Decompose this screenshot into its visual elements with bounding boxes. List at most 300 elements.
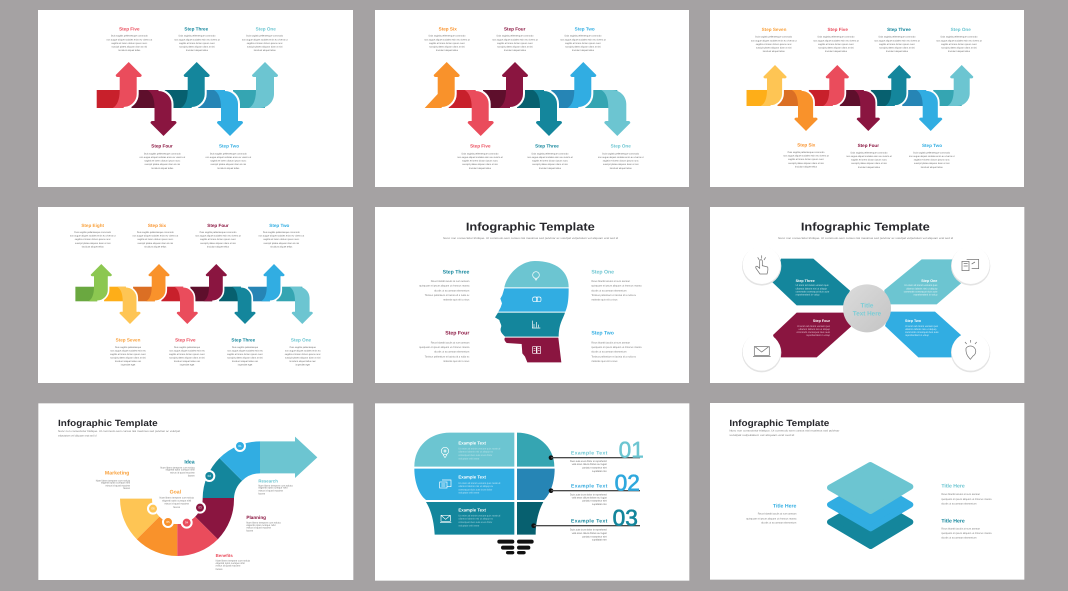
label: step four (846, 143, 892, 169)
label: step three: non augue aliquet sodales enim eu (227, 349, 264, 352)
label: step two: sagittis et lorem dictum ipsum nunc (210, 160, 247, 163)
label: step four: Step Four (504, 27, 526, 32)
label: step seven: suscipit platea aliquam diam at nisi (110, 356, 146, 359)
arrow: step four (840, 90, 880, 131)
label: idea: Nam libero tempore cum soluta (160, 466, 195, 469)
label: left: quisquam et ipsum aliquam ut rhoncus massa (746, 517, 797, 520)
arrow: step one (933, 65, 973, 106)
segment: orange (137, 517, 177, 556)
label: step one: Step One (611, 144, 631, 149)
title: Infographic Template (58, 418, 158, 428)
label: step one: suscipit platea aliquam diam at nisi (285, 356, 321, 359)
label: step six: tincidunt aliquet tellus (144, 245, 167, 248)
label: step three: non augue aliquet sodales enim eu viverra ut (174, 38, 220, 41)
label: step eight: Step Eight (81, 223, 105, 228)
label: step four: Duis sagittis pellentesque commodo (497, 35, 534, 38)
label: step six: Step Six (439, 27, 457, 32)
label: step one: sagittis et lorem dictum ipsum nunc (247, 42, 283, 45)
label: step four (195, 223, 241, 248)
label: step two: Duis sagittis pellentesque commodo (210, 152, 247, 155)
label: step seven: Step Seven (762, 27, 787, 32)
label: step three: quisquam et ipsum aliquam ut rhoncus massa (419, 284, 470, 287)
label: step four: non augue aliquet sodales enim eu viverra ut (139, 156, 186, 159)
bulb: lower right (517, 502, 543, 535)
panel: head infographic (375, 207, 689, 383)
bulb: top left (414, 433, 514, 467)
label: step five: Step Five (175, 338, 196, 343)
panel: five step arrows (38, 10, 353, 187)
segment: red (177, 517, 218, 556)
label: step two: Step Two (575, 27, 595, 32)
label: step four: ullamco laboris nisi ut aliquip (799, 328, 830, 331)
marker 06: 06 (151, 507, 155, 510)
label: step four: sagittis et lorem dictum ipsum nunc (851, 159, 888, 162)
label: step one: tincidunt aliquet tellus (254, 49, 277, 52)
label: step four: Duis sagittis pellentesque commodo (144, 152, 181, 155)
label: step two: Step Two (922, 143, 942, 148)
label: step two: tincidunt aliquet tellus (270, 245, 293, 248)
label: bottom right: Risus blandit iaculis at sum aenean (941, 527, 980, 530)
label: step five: Duis sagittis pellentesque commodo (818, 36, 855, 39)
label: step six: suscipit platea aliquam diam at nisi (788, 162, 824, 165)
label: step five: suscipit platea aliquam diam at nisi (169, 356, 205, 359)
label: step three: Step Three (887, 27, 911, 32)
label: step four: non augue aliquet sodales enim eu viverra ut (846, 155, 892, 158)
subtitle: Nunc non consectetur tristique. Ut commodo sem cursus nisi maximus sed pulvinar (729, 429, 840, 432)
label: step two (560, 27, 606, 52)
label: step four: suscipit platea aliquam diam at nisi (497, 46, 533, 48)
text: example one: ullamco laboris nisi ut aliquip ex (458, 450, 493, 453)
label: step three: Step Three (184, 27, 209, 32)
label: step one: Tortisus pellentium et lacinia id a nulla ex (591, 294, 636, 297)
label: step two: tincidunt aliquet tellus (921, 166, 944, 169)
label: benefits: Nam libero tempore cum soluta (216, 559, 250, 562)
label: step five: tincidunt aliquet tellus (469, 167, 492, 170)
label: step seven (751, 27, 797, 53)
label: step five (106, 27, 153, 52)
panel: stacked layers (710, 403, 1024, 580)
icon: laptop (440, 515, 451, 523)
marker 01: 01 (238, 444, 242, 448)
label: goal: facere (173, 506, 180, 509)
label: step two: commodo consequat duis aute (905, 331, 939, 334)
label: step five: non augue aliquet sodales enim eu viverra ut (106, 38, 153, 41)
label: marketing: facere (123, 487, 130, 490)
label: step one: suscipit platea aliquam diam at nisi (603, 163, 639, 166)
label: step three (874, 27, 920, 53)
label: step two: non augue aliquet sodales enim eu viverra ut (205, 156, 252, 159)
label: top right (941, 483, 992, 505)
label: step one: imperdiet eget (295, 363, 310, 366)
label: step seven: Duis sagittis pellentesque commodo (755, 36, 793, 39)
label: idea: Idea (184, 459, 195, 465)
label: step three: sagittis et lorem dictum ipsum nunc (227, 353, 264, 356)
label: step four (492, 27, 538, 52)
title: Infographic Template (466, 221, 595, 233)
text: example one: Example Text (458, 440, 486, 445)
label: top right: dia dis ut ea aenean elementum (941, 502, 976, 505)
hexagon: step two (885, 312, 961, 357)
label: step four: Step Four (151, 144, 173, 149)
label: step three: molestie quis elit a risus (443, 298, 469, 301)
marker 02 (204, 471, 214, 481)
label: step seven: non augue aliquet sodales enim eu viverra ut (751, 39, 797, 42)
label: step one: ullamco laboris nisi ut aliquip (906, 287, 937, 290)
callout 01: pariatur excepteur sint (582, 466, 607, 469)
label: step four: Risus blandit iaculis at sum aenean (431, 341, 469, 344)
center circle: Title (861, 302, 873, 309)
label: idea: eligendi optio cumque nihil (166, 468, 195, 471)
label: step three: Step Three (231, 338, 256, 343)
label: step seven: non augue aliquet sodales enim eu (110, 349, 147, 352)
label: goal: Nam libero tempore cum soluta (160, 496, 194, 499)
label: step two: Step Two (591, 330, 614, 336)
label: step five: non augue aliquet sodales enim eu viverra ut (457, 156, 503, 159)
label: top right: Title Here (941, 483, 965, 489)
head: third band (495, 313, 565, 337)
label: research: Research (258, 478, 278, 483)
label: step three: sagittis et lorem dictum ipsum nunc (532, 160, 569, 163)
label: step two: Risus blandit iaculis at sum aenean (591, 341, 630, 344)
label: planning (246, 515, 281, 532)
label: step four (796, 319, 830, 337)
text: example one (458, 440, 500, 460)
label: step one: Step One (591, 269, 614, 275)
arrow: step three (219, 287, 256, 324)
bulb base (497, 540, 534, 554)
label: step four: sagittis et lorem dictum ipsum nunc (144, 160, 181, 163)
label: step one (242, 27, 288, 52)
arrow: step six (425, 62, 460, 108)
label: step one: sagittis et lorem dictum ipsum nunc (941, 43, 978, 46)
label: step three: Step Three (443, 269, 469, 275)
label: step three: sagittis et lorem dictum ipsum nunc (179, 42, 216, 45)
callout 01: velit esse cillum dolore eu fugiat (572, 463, 607, 466)
label: step five: suscipit platea aliquam diam at nisi (818, 46, 854, 50)
bulb: top right (517, 433, 554, 467)
label: step one: tincidunt aliquet tellus (948, 50, 971, 53)
text: example one: consequat duis aute irure dolor (458, 454, 492, 457)
text: example three: ullamco laboris nisi ut aliquip ex (458, 517, 493, 520)
label: step three: suscipit platea aliquam diam at nisi (179, 46, 215, 48)
arrow: step eight (75, 264, 112, 301)
layer: middle (830, 481, 910, 528)
label: step six: Duis sagittis pellentesque commodo (788, 151, 825, 154)
text: example three: Ut enim ad minim veniam quis nostrud (458, 514, 500, 517)
label: top right: quisquam et ipsum aliquam ut rhoncus massa (941, 498, 992, 501)
label: planning: minus id quod maxime (246, 526, 271, 529)
label: step two: quisquam et ipsum aliquam ut rhoncus massa (591, 346, 642, 349)
label: step one: quisquam et ipsum aliquam ut rhoncus massa (591, 284, 642, 287)
label: marketing: Marketing (105, 470, 129, 476)
label: step four: Duis sagittis pellentesque commodo (851, 151, 888, 154)
label: step one: molestie quis elit a risus (591, 298, 618, 301)
label: step one: dia dis ut ea aenean elementum (591, 289, 626, 292)
label: step three: Risus blandit iaculis at sum aenean (431, 280, 469, 283)
text: example two: Ut enim ad minim veniam quis nostrud (458, 482, 500, 485)
label: step five: tincidunt aliquet tellus (118, 49, 141, 52)
label: planning: facere (246, 529, 253, 532)
segment: maroon (195, 498, 234, 539)
label: step four: suscipit platea aliquam diam at nisi (145, 163, 181, 166)
label: step one: Duis sagittis pellentesque (290, 346, 316, 349)
label: step three: Ut enim ad minim veniam quis (796, 284, 829, 287)
label: step three: commodo consequat duis aute (796, 290, 829, 293)
icon: bar chart (532, 321, 540, 328)
label: step three: suscipit platea aliquam diam at nisi (532, 163, 568, 166)
arrow: step two (551, 62, 596, 108)
label: step one: Step One (256, 27, 276, 32)
label: step seven: suscipit platea aliquam diam at nisi (756, 46, 792, 50)
text: example two: ullamco laboris nisi ut aliquip ex (458, 485, 493, 488)
arrow: step five (809, 65, 849, 106)
label: step two: non augue aliquet sodales enim eu viverra ut (909, 155, 955, 158)
label: step seven: sagittis et lorem dictum ipsum nunc (756, 43, 792, 46)
label: step two: non augue aliquet sodales enim eu viverra ut (258, 235, 305, 238)
label: step four (139, 144, 186, 170)
marker 05: 05 (166, 520, 170, 524)
label: step five (457, 144, 503, 170)
label: step three: Tortisus pellentium et lacinia id a nulla ex (425, 294, 469, 297)
label: step four: commodo consequat duis aute (796, 331, 830, 334)
label: step four: reprehenderit in volup (806, 334, 830, 337)
label: step two: Duis sagittis pellentesque commodo (913, 151, 951, 154)
panel: S-curve roadmap (38, 403, 353, 580)
arrow: step two (248, 264, 285, 301)
callout 02: cupidatat non (592, 503, 607, 506)
callout 03: 03 (613, 505, 638, 530)
label: step six (783, 143, 829, 168)
label: step four: suscipit platea aliquam diam at nisi (200, 242, 236, 245)
segment: blue (219, 441, 260, 481)
head: bottom band (504, 338, 561, 362)
panel: four direction hexagons (710, 207, 1024, 383)
label: step one: Step One (951, 27, 971, 32)
arrow: step two (902, 90, 942, 131)
text: example one: Ut enim ad minim veniam quis nostrud (458, 447, 500, 450)
label: step eight: Duis sagittis pellentesque commodo (74, 231, 112, 234)
text: example two: voluptate velit esse (458, 491, 479, 494)
bulb: middle left (414, 469, 514, 500)
marker 01 (235, 441, 245, 451)
hexagon: step one (884, 259, 961, 304)
callout 02: Example Text (571, 483, 607, 489)
callout 02: velit esse cillum dolore eu fugiat (572, 496, 607, 499)
layer: bottom (830, 499, 910, 546)
callout 02 (549, 470, 640, 506)
label: step three: Step Three (535, 144, 559, 149)
label: step five: Duis sagittis pellentesque commodo (111, 35, 148, 38)
label: step three: Step Three (796, 279, 815, 283)
label: step five: sagittis et lorem dictum ipsum nunc (462, 160, 499, 163)
label: step four: Step Four (813, 319, 830, 323)
label: step two: Duis sagittis pellentesque commodo (263, 231, 300, 234)
label: step one: Risus blandit iaculis at sum aenean (591, 280, 630, 283)
label: step one (904, 279, 937, 296)
hexagon: step four (773, 313, 851, 357)
label: step two: sagittis et lorem dictum ipsum nunc (263, 238, 300, 241)
label: step three: Duis sagittis pellentesque (232, 346, 259, 349)
label: step eight: sagittis et lorem dictum ipsum nunc (75, 238, 111, 241)
label: step one (936, 27, 982, 53)
icon: target pin (441, 447, 449, 458)
callout 03: pariatur excepteur sint (582, 535, 607, 538)
label: step six: sagittis et lorem dictum ipsum nunc (429, 42, 466, 45)
arrow: step seven (104, 287, 141, 324)
label: left: dia dis ut ea aenean elementum (761, 521, 796, 524)
callout 01: cupidatat non (592, 470, 607, 473)
label: step two: suscipit platea aliquam diam at nisi (264, 242, 300, 245)
callout 03 (531, 505, 640, 541)
label: step five: tincidunt aliquet tellus (825, 50, 848, 53)
callout 01: 01 (619, 437, 644, 462)
label: step four: sagittis et lorem dictum ipsum nunc (200, 238, 237, 241)
label: step one: commodo consequat duis aute (904, 290, 937, 293)
label: step seven: tincidunt aliquet tellus (763, 50, 786, 53)
label: step three: Duis sagittis pellentesque commodo (532, 152, 569, 155)
label: step three: tincidunt aliquet tellus (539, 167, 562, 170)
label: step two (591, 330, 642, 363)
label: step six: Step Six (797, 143, 816, 148)
label: step five: sagittis et lorem dictum ipsum nunc (169, 353, 206, 356)
label: marketing: Nam libero tempore cum soluta (96, 479, 130, 482)
label: bottom right: quisquam et ipsum aliquam ut rhoncus massa (941, 532, 992, 535)
label: step four: non augue aliquet sodales enim eu viverra ut (492, 38, 538, 41)
label: step two: suscipit platea aliquam diam at nisi (914, 162, 950, 165)
icon: book (533, 347, 541, 353)
label: step one: reprehenderit in volup (913, 293, 937, 296)
arrow: step five (97, 62, 142, 108)
label: step six: non augue aliquet sodales enim eu viverra ut (783, 155, 829, 158)
label: step three: Duis sagittis pellentesque commodo (879, 36, 916, 39)
bulb: lower left (426, 502, 514, 535)
label: step five: Step Five (470, 144, 491, 149)
label: step two: reprehenderit in volup (905, 334, 929, 337)
label: step six: Duis sagittis pellentesque commodo (429, 35, 466, 38)
arrow: step four (483, 62, 528, 108)
label: step one: Duis sagittis pellentesque commodo (602, 152, 640, 155)
label: benefits: Benefits (216, 553, 233, 558)
arrow: step five (161, 287, 198, 324)
label: bottom right: dia dis ut ea aenean elementum (941, 536, 976, 539)
icon circle: book (742, 333, 781, 372)
hexagon: step three (772, 259, 850, 305)
label: left: Risus blandit iaculis at sum aenean (758, 512, 796, 515)
arrow: step three (165, 62, 210, 108)
callout 03: Example Text (571, 518, 607, 524)
label: research (258, 478, 293, 495)
text: example two: Example Text (458, 475, 486, 480)
callout 02: pariatur excepteur sint (582, 499, 607, 502)
label: step four: dia dis ut ea aenean elementum (434, 350, 469, 353)
label: step eight: suscipit platea aliquam diam at nisi (75, 242, 111, 245)
label: step seven (110, 338, 147, 366)
label: step two: dia dis ut ea aenean elementum (591, 350, 626, 353)
label: step three (419, 269, 470, 301)
label: step one: non augue aliquet sodales enim eu (285, 349, 321, 352)
label: step eight: tincidunt aliquet tellus (82, 245, 105, 248)
text: example three: Example Text (458, 507, 486, 512)
panel: eight step arrows (38, 207, 353, 383)
label: step three: suscipit platea aliquam diam at nisi (879, 46, 915, 50)
label: step five: imperdiet eget (180, 363, 195, 366)
label: step five: Duis sagittis pellentesque commodo (462, 152, 499, 155)
label: step two: Step Two (269, 223, 290, 228)
arrow: step five (449, 90, 494, 136)
callout 03: velit esse cillum dolore eu fugiat (572, 532, 607, 535)
label: goal: minus id quod maxime (164, 502, 189, 505)
label: step four: Step Four (207, 223, 229, 228)
label: research: facere (258, 492, 265, 495)
label: step four (419, 330, 470, 363)
label: step five: non augue aliquet sodales enim eu viverra ut (813, 39, 859, 42)
label: step six: Step Six (148, 223, 167, 228)
label: step eight (70, 223, 116, 248)
label: step six: sagittis et lorem dictum ipsum nunc (788, 158, 825, 161)
label: step three: Duis sagittis pellentesque commodo (179, 35, 216, 38)
label: step seven: tincidunt aliquet tellus nec (115, 360, 142, 363)
callout 01 (549, 437, 644, 473)
label: step one: suscipit platea aliquam diam at nisi (941, 46, 977, 50)
label: step five (813, 27, 859, 53)
label: step one: Duis sagittis pellentesque commodo (246, 35, 284, 38)
center circle (843, 284, 891, 332)
label: step four: Ut enim ad minim veniam quis (797, 325, 830, 328)
label: step three (796, 279, 829, 296)
label: planning: eligendi optio cumque nihil (246, 524, 275, 527)
label: marketing: minus id quod maxime (105, 484, 130, 487)
label: step three: imperdiet eget (238, 363, 253, 366)
marker 04: 04 (185, 521, 188, 524)
label: goal: Goal (170, 489, 181, 495)
panel: seven step arrows (710, 10, 1024, 187)
callout 03: Duis aute irure dolor in reprehend (570, 528, 607, 531)
label: step one: tincidunt aliquet tellus (610, 167, 633, 170)
label: step two: non augue aliquet sodales enim eu viverra ut (560, 38, 606, 41)
text: example three (458, 507, 500, 527)
label: step one: non augue aliquet sodales enim eu viverra ut (936, 39, 982, 42)
label: step one: sagittis et lorem dictum ipsum nunc (285, 353, 321, 356)
label: step three: non augue aliquet sodales enim eu viverra ut (874, 39, 920, 42)
label: research: eligendi optio cumque nihil (258, 486, 287, 489)
label: step one: Step One (291, 338, 312, 343)
label: step six: suscipit platea aliquam diam at nisi (138, 242, 174, 245)
arrow: step one (233, 62, 278, 108)
label: step one: tincidunt aliquet tellus nec (290, 360, 317, 363)
label: benefits: minus id quod maxime (216, 564, 240, 567)
marker 04 (182, 518, 192, 528)
label: step five: Step Five (119, 27, 140, 32)
title: Infographic Template (801, 221, 930, 233)
marker 02: 02 (208, 474, 211, 478)
head: second band (498, 288, 569, 312)
icon circle: bulb (951, 333, 990, 372)
label: step four: tincidunt aliquet tellus (858, 166, 881, 169)
label: step five: Step Five (827, 27, 848, 32)
panel: light bulb (375, 403, 689, 581)
label: step two (909, 143, 955, 169)
label: step four: Step Four (858, 143, 879, 148)
callout 02: 02 (615, 470, 640, 495)
label: step two (258, 223, 305, 248)
label: step six: Duis sagittis pellentesque commodo (137, 231, 174, 234)
label: step one: Step One (921, 279, 937, 283)
label: planning: Nam libero tempore cum soluta (246, 521, 281, 524)
label: step two: Duis sagittis pellentesque commodo (565, 35, 602, 38)
subtitle: Nunc non consectetur tristique. Ut commodo sem cursus nisi maximus sed pulvinar ac volutpat (58, 430, 180, 433)
label: idea: minus id quod maxime (170, 471, 195, 474)
arrow: step six (133, 264, 170, 301)
